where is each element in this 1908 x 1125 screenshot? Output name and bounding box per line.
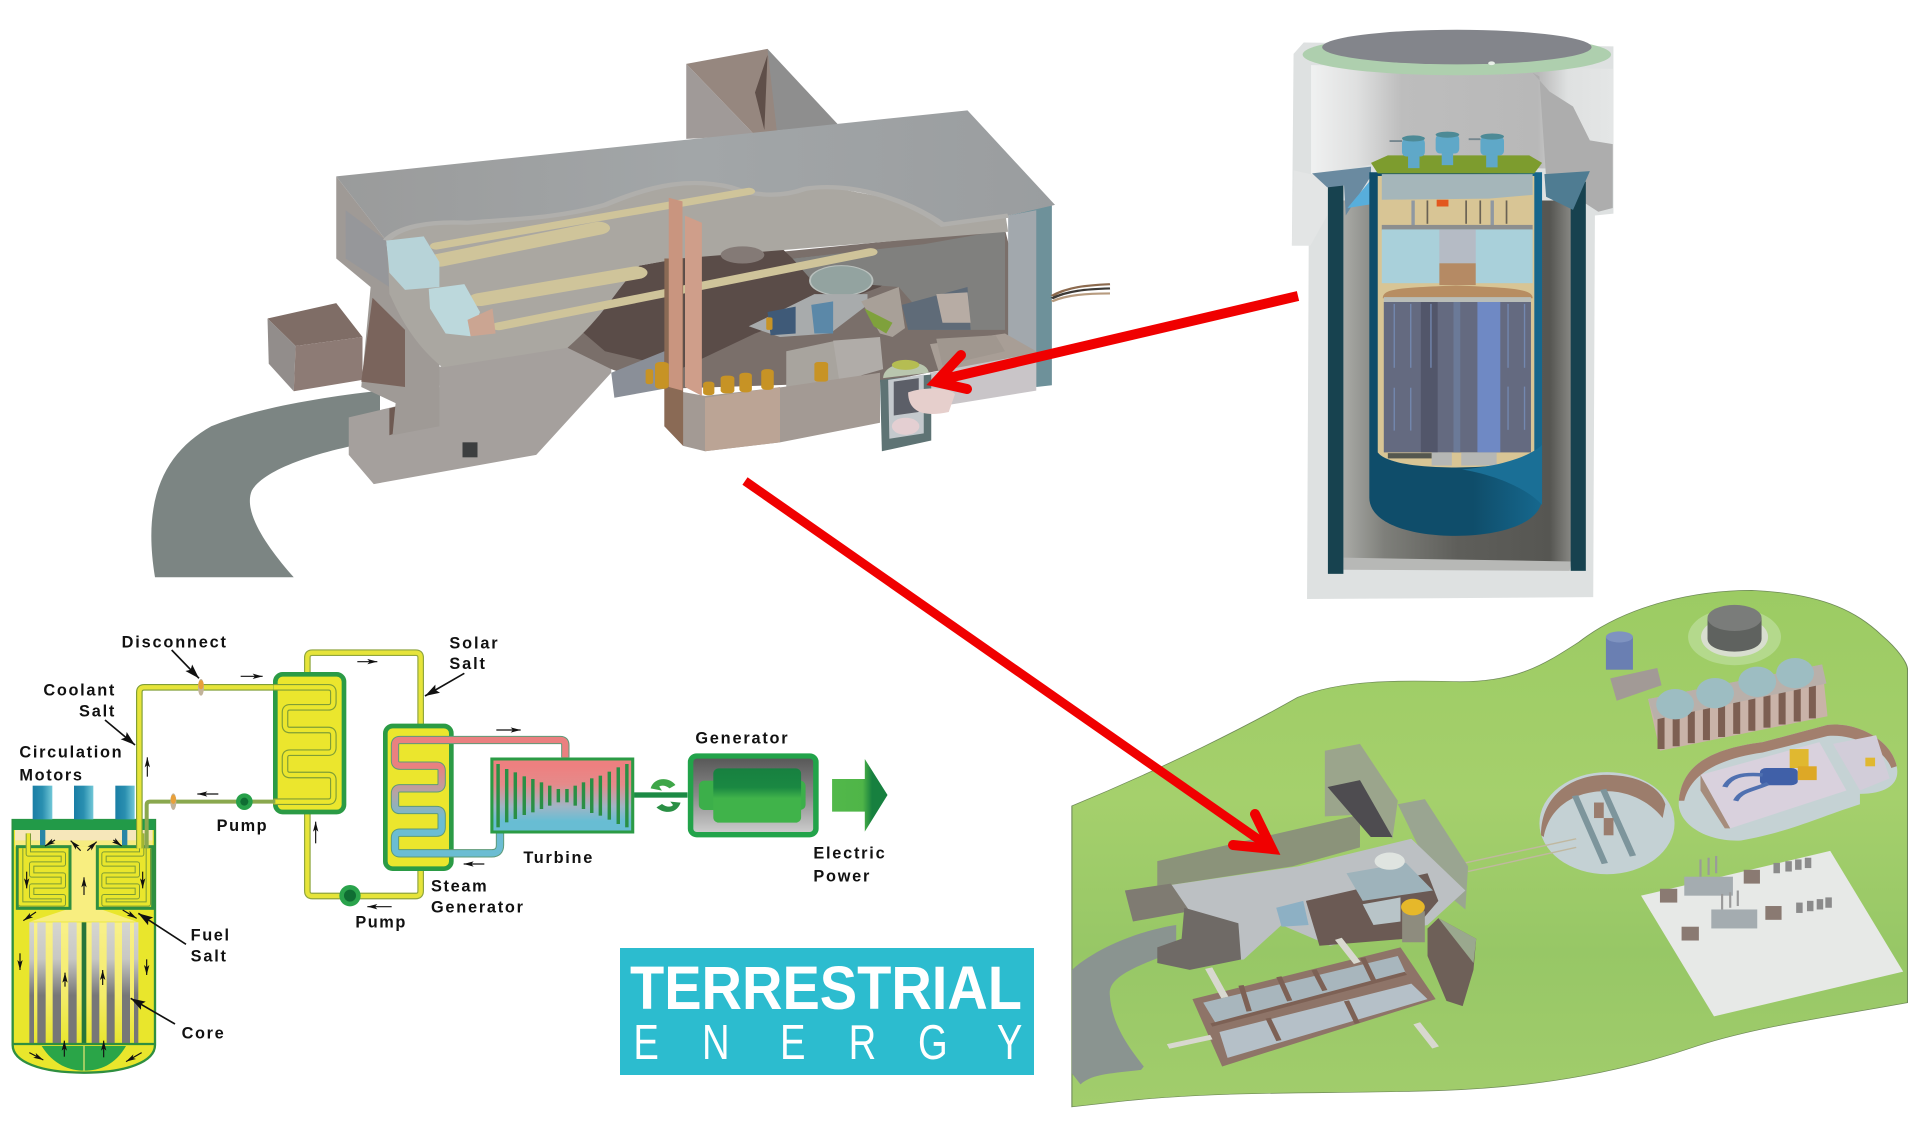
schematic labels: Motors <box>19 766 82 784</box>
centre rooms <box>1276 863 1438 946</box>
roof edge <box>386 183 1008 241</box>
round tanks <box>721 246 872 296</box>
floor slab <box>388 173 1008 367</box>
schematic labels <box>19 634 885 1043</box>
brass vessels <box>646 317 828 395</box>
miniature reactor silo <box>880 360 931 451</box>
steam generator <box>385 726 451 869</box>
irregular shadow <box>1533 73 1613 212</box>
blue box units <box>386 236 496 336</box>
side wall <box>1398 799 1468 909</box>
transformers <box>1660 856 1832 941</box>
main front wall <box>349 337 611 484</box>
core top plate <box>1383 285 1533 302</box>
illustration: reactor core unit cutaway <box>1292 30 1613 599</box>
lower wall rooms <box>611 351 880 451</box>
floor <box>1168 839 1465 963</box>
turbine hall <box>1679 725 1897 841</box>
underground building <box>1168 939 1436 1066</box>
front annex recess <box>389 401 416 435</box>
front machinery rooms <box>786 335 1005 392</box>
schematic labels: Salt <box>79 702 115 720</box>
schematic labels: Fuel <box>191 927 229 945</box>
output cables <box>1052 284 1110 301</box>
schematic labels: Electric <box>813 845 885 863</box>
containment dome <box>1375 853 1405 870</box>
left annex blocks <box>1125 884 1241 970</box>
interior rear wall <box>792 230 1005 330</box>
substation yard <box>1641 851 1903 1016</box>
schematic labels: Pump <box>217 817 267 835</box>
road <box>151 391 380 577</box>
schematic labels: Generator <box>695 729 788 747</box>
reactor vessel <box>1369 172 1542 536</box>
schematic labels: Solar <box>449 634 498 652</box>
right lower floor <box>930 333 1036 383</box>
schematic labels: Circulation <box>19 744 122 762</box>
cavity floor <box>1343 558 1571 571</box>
liner <box>1378 176 1534 467</box>
lower plenum <box>1388 452 1497 466</box>
schematic labels: Turbine <box>523 849 592 867</box>
schematic labels: Power <box>813 868 870 886</box>
solar salt loop <box>307 653 421 896</box>
steam pipe elbow <box>908 389 955 414</box>
schematic labels: Coolant <box>43 682 115 700</box>
grass island <box>1072 590 1908 1107</box>
vessel sheen <box>1462 445 1542 505</box>
top head <box>1371 155 1542 173</box>
reactor silo with yellow lid <box>1401 899 1425 942</box>
cold return pipe <box>147 802 275 848</box>
centre riser <box>1439 229 1476 285</box>
heat exchanger block <box>1382 229 1533 283</box>
interior fill <box>568 230 1036 389</box>
illustration: site plan <box>1072 590 1908 1107</box>
equipment pad <box>930 353 1036 405</box>
logo: Terrestrial Energy: ENERGY <box>633 1016 1022 1070</box>
brown stack wall <box>664 258 683 446</box>
rotating lid <box>1303 30 1611 75</box>
diagram: molten salt reactor schematic <box>13 634 888 1073</box>
logo: Terrestrial Energy: TERRESTRIAL <box>630 954 1022 1022</box>
connecting trench <box>1465 839 1576 872</box>
cavity <box>1343 200 1573 563</box>
heat exchanger pipes <box>436 191 871 326</box>
reactor vessel <box>13 786 155 1073</box>
intermediate heat exchanger <box>273 674 344 812</box>
control rods area <box>1382 200 1533 230</box>
schematic labels: Steam <box>431 878 487 896</box>
cooling tower <box>1688 605 1781 665</box>
pump motors <box>1390 132 1504 168</box>
rotation arrows <box>651 779 681 812</box>
right annex <box>1428 918 1476 1006</box>
steam loop <box>395 740 565 853</box>
pumps <box>236 793 361 906</box>
rear annex <box>268 303 362 391</box>
support columns <box>1328 182 1586 574</box>
power train: turbine, shaft, generator <box>492 756 888 835</box>
louvers <box>346 210 389 287</box>
schematic labels: Disconnect <box>122 634 227 652</box>
round reactor support building <box>1539 772 1675 874</box>
column brackets <box>1312 167 1590 216</box>
schematic labels: Core <box>182 1025 224 1043</box>
left side wall <box>336 176 439 435</box>
turbine <box>492 759 633 832</box>
ventilation tower <box>686 49 838 139</box>
electric power arrow <box>832 759 888 832</box>
generator <box>691 756 816 835</box>
pink stacks <box>669 198 702 396</box>
rear wall of nuclear building <box>1157 815 1360 887</box>
head shielding <box>1382 174 1533 200</box>
arrow: site plan to building <box>745 481 1272 849</box>
utility shed <box>1610 668 1662 701</box>
inner recess <box>361 298 405 387</box>
equipment rooms <box>749 287 971 337</box>
roof <box>336 110 1055 241</box>
tank farm <box>1648 658 1828 751</box>
schematic labels: Salt <box>191 947 227 965</box>
left shell lower band <box>1292 170 1327 246</box>
schematic labels: Pump <box>355 913 405 931</box>
arrow: building to reactor unit <box>936 296 1298 389</box>
road <box>1072 925 1176 1084</box>
shaft <box>634 792 687 798</box>
coolant salt pipe <box>139 687 277 848</box>
diagram: plant building cutaway <box>151 49 1110 577</box>
graphite core <box>1384 302 1531 452</box>
door <box>462 442 478 457</box>
schematic labels: Salt <box>449 655 486 673</box>
concrete silo shell <box>1292 43 1613 599</box>
disconnect valves <box>170 679 204 810</box>
vent tower <box>1325 744 1398 839</box>
schematic labels: Generator <box>431 899 524 917</box>
leader arrows <box>105 650 464 1024</box>
blue storage tank <box>1606 631 1633 670</box>
interior dark space <box>568 241 942 369</box>
upper shell shading <box>1311 65 1613 174</box>
flow arrows <box>20 662 521 1062</box>
right end wall <box>1008 205 1052 387</box>
logo: Terrestrial Energy <box>620 948 1034 1075</box>
